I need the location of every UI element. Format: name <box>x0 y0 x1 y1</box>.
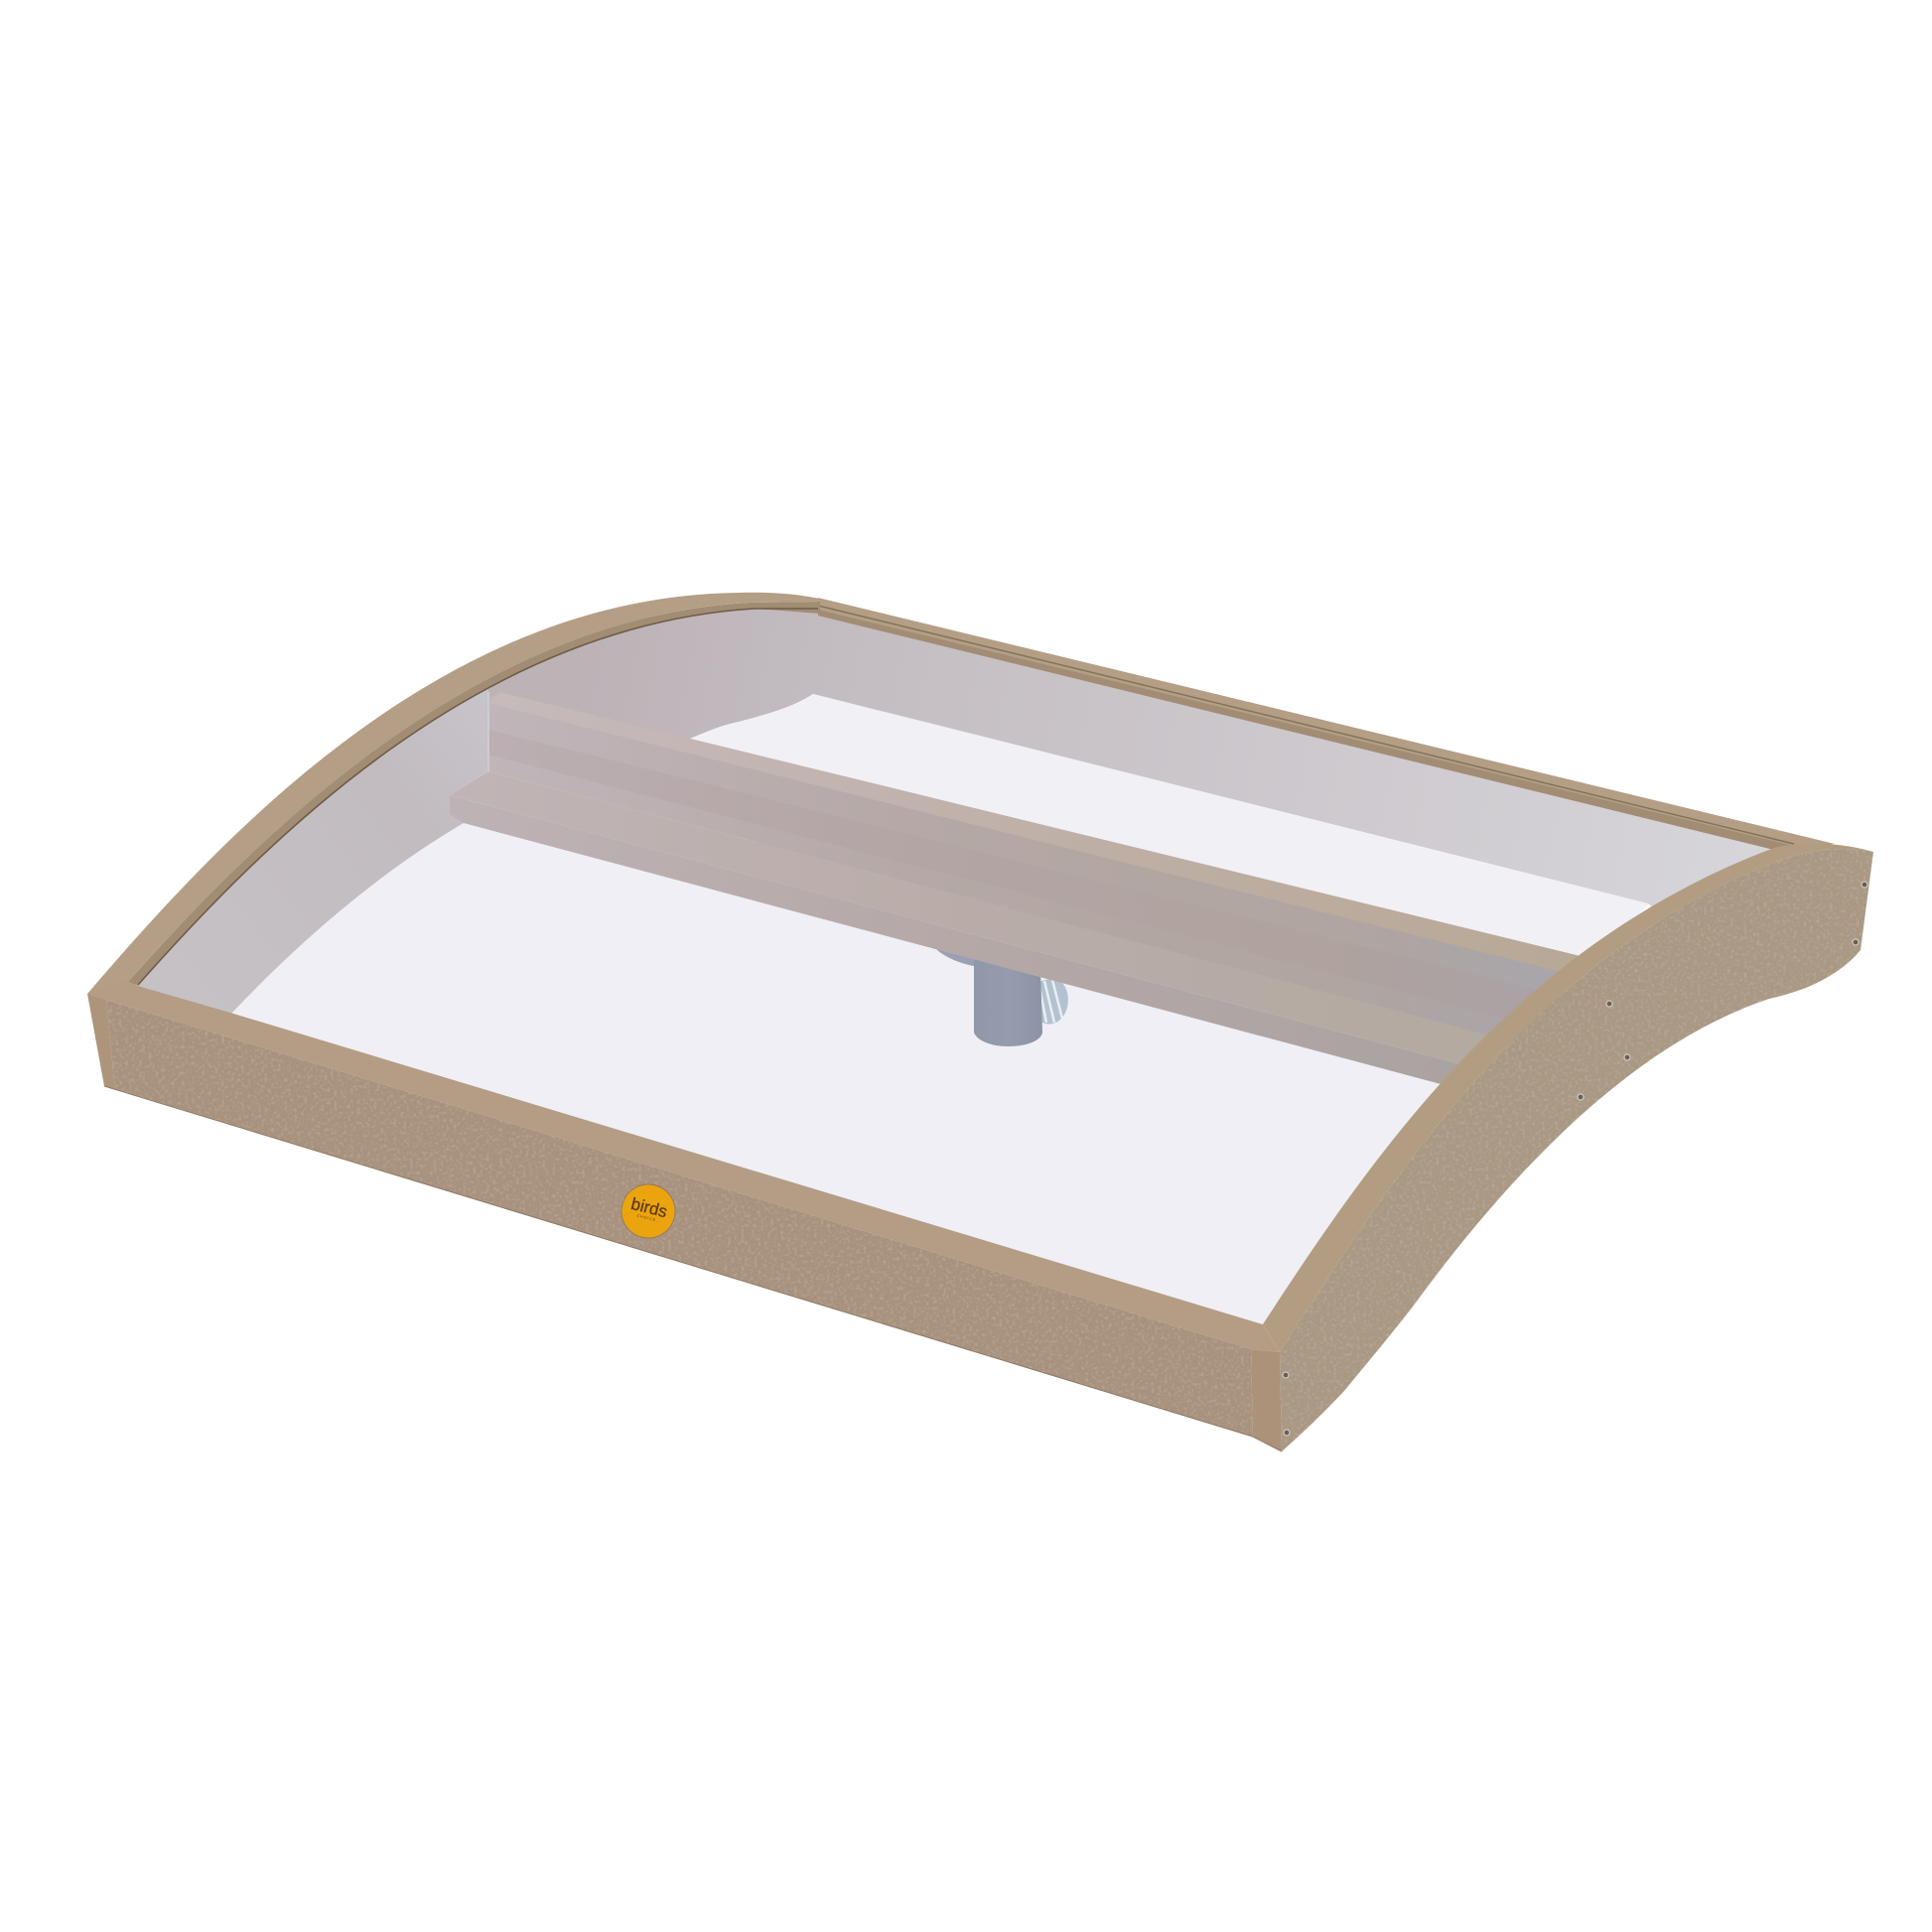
glass side panel edge highlight <box>487 692 489 771</box>
left rim groove band <box>127 602 820 985</box>
left curved glass panel <box>129 675 488 1014</box>
screws <box>1283 882 1867 1436</box>
left rim top band <box>87 593 820 1000</box>
beam and shelf <box>450 692 1588 1089</box>
floor: clear panel seen through to white <box>231 694 1650 1325</box>
logo wordmark: birds <box>629 1194 669 1221</box>
beam top edge <box>487 692 1588 975</box>
badge: birds choice logo <box>616 1178 681 1244</box>
back rim outer band <box>818 598 1835 850</box>
front panel right end piece <box>1251 1349 1282 1451</box>
side panel <box>1280 849 1873 1451</box>
pipe flange <box>935 948 1003 969</box>
front panel <box>106 1000 1253 1437</box>
front rim top face <box>87 980 1280 1352</box>
back rim groove <box>818 606 1794 844</box>
front panel left end piece <box>87 994 115 1089</box>
white strip seen behind the beam <box>690 694 1648 958</box>
shelf ledge front face <box>450 795 1479 1089</box>
pipe body <box>974 953 1042 1046</box>
thumb screw <box>1033 979 1068 1024</box>
logo subline: CHOICE <box>636 1213 656 1222</box>
mounting pipe under the shelf <box>935 948 1068 1046</box>
back rim lower band <box>818 610 1794 850</box>
left rim groove line <box>138 609 818 985</box>
shelf ledge top face <box>450 771 1509 1069</box>
back glass panel <box>488 605 1787 928</box>
side rim top face <box>1263 844 1873 1352</box>
beam face <box>488 695 1588 1043</box>
front panel bottom shadow edge <box>104 1086 1282 1451</box>
left curved rim <box>87 593 820 1000</box>
back rim <box>818 598 1835 850</box>
beam soft streak <box>488 730 1549 1023</box>
